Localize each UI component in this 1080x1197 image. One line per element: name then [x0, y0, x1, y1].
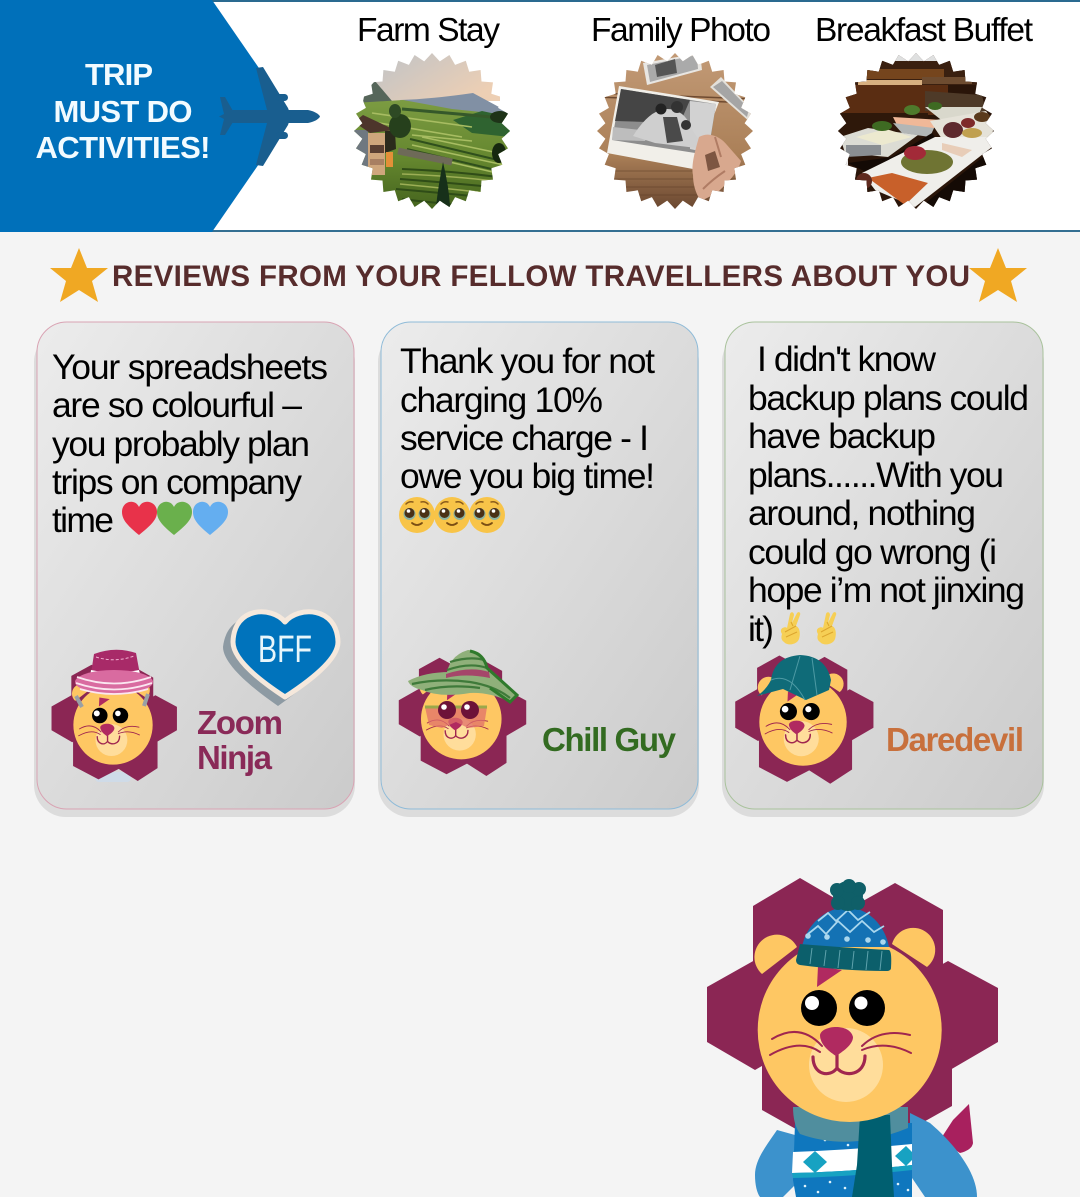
- icon: pleading faces: [399, 497, 505, 533]
- photo: family: [597, 53, 753, 209]
- lion scarf: [793, 1107, 908, 1197]
- review text: I didn't know: [757, 339, 936, 379]
- banner arrow: trip must do activities: ACTIVITIES!: [36, 130, 210, 165]
- banner arrow: trip must do activities: [0, 0, 292, 232]
- activity: farm stay: [354, 12, 510, 209]
- name: Daredevil: Daredevil: [886, 721, 1024, 758]
- review text: plans......With you: [748, 455, 1004, 495]
- activity: family photo: [591, 12, 771, 209]
- activity: family photo: Family Photo: [591, 12, 771, 49]
- lion mane: [707, 878, 998, 1137]
- character: Daredevil lion: [735, 655, 873, 784]
- name: Zoom Ninja: Ninja: [197, 739, 273, 776]
- character: Zoom Ninja lion: [52, 650, 177, 782]
- activity: breakfast buffet: Breakfast Buffet: [815, 12, 1034, 49]
- activity: farm stay: Farm Stay: [357, 12, 500, 49]
- review text: trips on company: [52, 462, 302, 502]
- icon: airplane: [219, 67, 320, 166]
- name: Chill Guy: Chill Guy: [542, 721, 677, 758]
- review text: service charge - I: [400, 418, 649, 458]
- review text: charging 10%: [400, 380, 603, 420]
- heading: reviews: REVIEWS FROM YOUR FELLOW TRAVELLERS ABOUT YOU: [112, 260, 970, 293]
- review text: owe you big time!: [400, 456, 655, 496]
- icon: three hearts: [122, 502, 228, 535]
- badge: BFF heart: [223, 612, 338, 706]
- name: Zoom Ninja: Zoom: [197, 704, 283, 741]
- banner arrow: trip must do activities: MUST DO: [54, 94, 192, 129]
- sunglasses: [425, 707, 487, 728]
- review text: it): [748, 609, 774, 649]
- photo: buffet: [838, 53, 994, 209]
- heading: reviews: [50, 248, 970, 302]
- photo: farm: [354, 53, 510, 209]
- lion sweater: [792, 1123, 912, 1197]
- review text: hope i’m not jinxing: [748, 570, 1025, 610]
- banner arrow: trip must do activities: TRIP: [85, 57, 153, 92]
- lion tail: [940, 1104, 973, 1153]
- lion arms: [755, 1113, 977, 1197]
- icon: crossed fingers: [781, 612, 836, 644]
- review text: [400, 341, 655, 496]
- panel: review by Zoom Ninja: [34, 322, 355, 817]
- review text: are so colourful –: [52, 385, 302, 425]
- panel: review by Daredevil: [722, 322, 1044, 817]
- activity: breakfast buffet: [815, 12, 1034, 209]
- character: large lion mascot: [707, 878, 998, 1197]
- name: Zoom Ninja: [197, 704, 283, 776]
- icon: left star: [50, 248, 108, 302]
- sun hat: [446, 650, 490, 682]
- review text: Your spreadsheets: [52, 347, 328, 387]
- review text: could go wrong (i: [748, 532, 997, 572]
- review text: time: [52, 500, 114, 540]
- review text: [748, 339, 1029, 649]
- lion head: [754, 928, 942, 1122]
- review text: [52, 347, 328, 540]
- review text: around, nothing: [748, 493, 976, 533]
- panel: review by Chill Guy: [378, 322, 699, 817]
- ninja headphones and hat: [76, 694, 148, 707]
- review text: Thank you for not: [400, 341, 655, 381]
- review text: you probably plan: [52, 424, 310, 464]
- badge: BFF heart: BFF: [258, 629, 312, 671]
- icon: right star: [969, 248, 1027, 302]
- top banner: [0, 0, 1080, 232]
- character: Chill Guy lion: [399, 650, 526, 776]
- review text: backup plans could: [748, 378, 1029, 418]
- beanie hat: [796, 879, 891, 971]
- baseball cap: [757, 655, 831, 700]
- review text: have backup: [748, 416, 936, 456]
